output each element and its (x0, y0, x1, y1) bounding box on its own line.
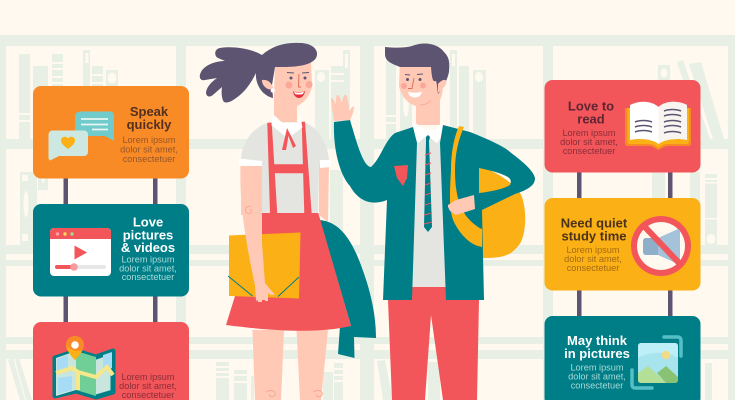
body text: Lorem ipsum (122, 135, 176, 145)
icon: no sound sign (631, 216, 691, 276)
girl neck and face (274, 62, 312, 125)
body text: consectetuer (571, 380, 623, 390)
boy backpack (450, 150, 525, 258)
body text: consectetuer (567, 263, 619, 273)
panel: may think in pictures (544, 316, 700, 400)
heading: Love (133, 214, 163, 230)
character: boy (331, 44, 535, 400)
body text: Lorem ipsum (562, 128, 616, 138)
icon: video player (50, 228, 111, 276)
boy neck and face (399, 60, 443, 125)
panel: love pictures and videos (33, 204, 189, 296)
book details (19, 53, 717, 383)
heading line two: study time (561, 228, 627, 244)
boy face details (401, 74, 431, 105)
girl ear and earring (262, 80, 274, 90)
girl right arm (319, 165, 329, 222)
held jacket (320, 220, 376, 358)
girl cuffs (239, 158, 331, 168)
boy hair (385, 44, 449, 94)
girl hair (200, 43, 317, 103)
body text (564, 245, 622, 273)
body text: dolor sit amet, (564, 254, 622, 264)
icon: open book (625, 102, 691, 150)
body text: Lorem ipsum (121, 254, 175, 264)
girl shirt (241, 122, 329, 215)
body text: Lorem ipsum (570, 362, 624, 372)
body text: dolor sit amet, (119, 264, 177, 274)
girl collar (272, 115, 302, 138)
icon: picture frame (632, 337, 681, 388)
girl face details (286, 72, 312, 98)
icon: chat bubbles (48, 112, 114, 160)
boy pocket badge (394, 165, 408, 186)
girl ribbon (282, 128, 296, 150)
body text: consectetuer (123, 154, 175, 164)
body text: dolor sit amet, (120, 144, 178, 154)
body text (119, 254, 177, 282)
heading line two: read (577, 112, 605, 126)
girl skin swirls (245, 206, 322, 397)
heading: Speak (130, 104, 169, 119)
heading: May think (567, 333, 628, 348)
bag strap (450, 126, 482, 247)
heading: Need quiet (561, 216, 628, 230)
body text: consectetuer (122, 272, 174, 282)
body text: consectetuer (563, 146, 615, 156)
boy collar (414, 122, 443, 143)
boy jacket right panel (440, 125, 535, 300)
body text: dolor sit amet, (568, 372, 626, 382)
connector posts left (64, 176, 158, 326)
folder flap lines (228, 276, 299, 296)
girl arm over folder (240, 166, 275, 302)
body text (120, 135, 178, 164)
body text (560, 128, 618, 156)
body text: dolor sit amet, (119, 381, 177, 391)
panel: speak quickly (33, 86, 189, 178)
heading line two: pictures (123, 228, 173, 242)
body text: Lorem ipsum (121, 372, 175, 382)
boy jacket (334, 120, 417, 300)
girl skirt (226, 213, 351, 331)
panel: map reader (33, 322, 189, 400)
girl left arm base (241, 166, 262, 215)
girl legs (252, 330, 328, 400)
body text: Lorem ipsum (566, 245, 620, 255)
icon: folded map with pin (55, 336, 113, 397)
body text: dolor sit amet, (560, 137, 618, 147)
heading line two: in pictures (564, 346, 630, 361)
boy shirt (412, 130, 446, 287)
boy trousers (388, 287, 479, 400)
boy ear (438, 80, 446, 93)
boy tie (424, 135, 432, 232)
character: girl (200, 43, 376, 400)
heading line three: & videos (121, 240, 175, 255)
boy waving hand (331, 95, 354, 121)
girl apron straps (267, 122, 312, 214)
body text (119, 372, 177, 400)
heading: Love to (568, 98, 614, 114)
panel: love to read (544, 80, 700, 172)
panel: need quiet study time (544, 198, 700, 290)
body text (568, 362, 626, 390)
folder (229, 232, 300, 298)
heading line two: quickly (127, 117, 172, 132)
connector posts right (577, 170, 672, 320)
body text: consectetuer (122, 390, 174, 400)
boy hand on strap (448, 195, 475, 215)
